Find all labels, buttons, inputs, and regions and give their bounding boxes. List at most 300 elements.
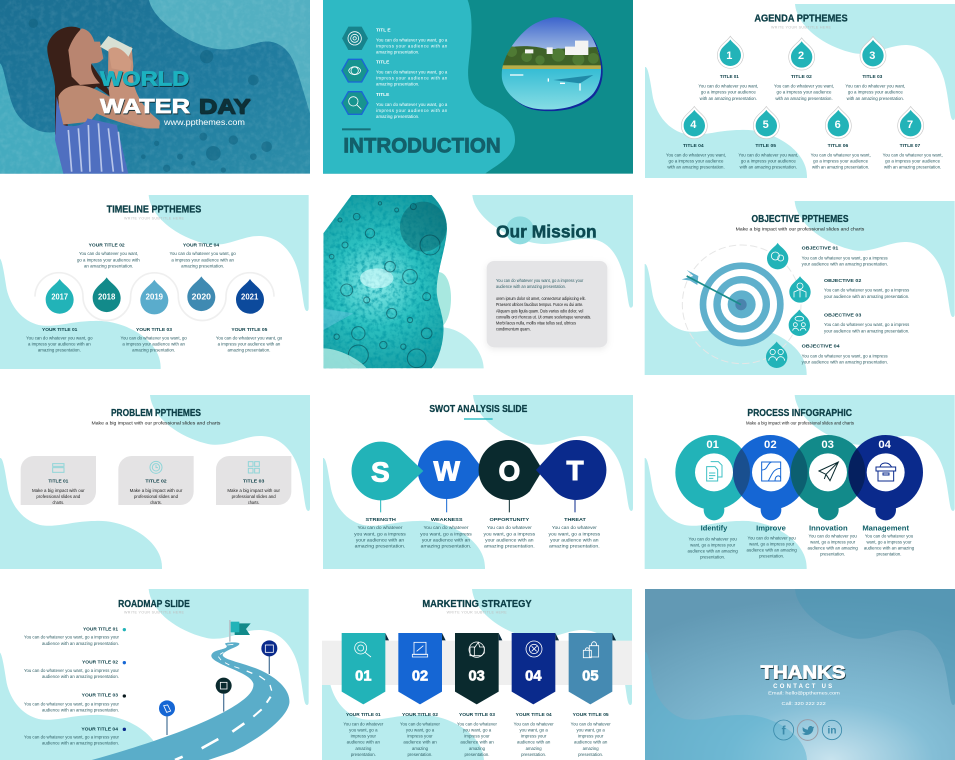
- strategy text 02: impress your: [407, 734, 433, 739]
- agenda item 6: go a impress your audience: [813, 159, 869, 164]
- ribbon 02: [398, 633, 446, 704]
- agenda item 4: TITLE 04: [683, 143, 704, 148]
- process step 02: [733, 435, 808, 520]
- icon: bubbles: [29, 19, 272, 173]
- objective drop 01 with icon: [767, 243, 788, 269]
- swot W shape: W: [433, 456, 460, 487]
- objective text 02: You can do whatever you want, go a impress: [824, 288, 909, 293]
- strategy text 03: impress your: [464, 734, 490, 739]
- panel: SWOT analysis slide: [323, 395, 633, 569]
- road illustration: [92, 642, 289, 760]
- ribbon 02: 02: [412, 668, 428, 684]
- swot S shape: S: [371, 456, 390, 487]
- strategy text 01: amazing: [355, 746, 372, 751]
- problem card 2: professional slides and: [134, 494, 179, 499]
- problem card 1: [21, 456, 96, 505]
- swot text: threat: you want, go a impress: [548, 531, 600, 536]
- text card: audience with an amazing presentation.: [496, 284, 566, 289]
- swot S shape: [352, 442, 423, 500]
- timeline text: your title 04: amazing presentation.: [181, 263, 224, 268]
- agenda item 3: 3: [869, 50, 875, 62]
- text block: title 3: impress your audience with an: [376, 108, 448, 113]
- photo: resort pool: [500, 17, 607, 113]
- problem card 1: TITLE 01: [48, 479, 69, 484]
- agenda item 5: with an amazing presentation.: [740, 165, 797, 170]
- title: World Water Day: WATER: [100, 95, 190, 118]
- timeline drop 2017: 2017: [51, 291, 68, 301]
- roadmap text 01: YOUR TITLE 01: [83, 626, 119, 631]
- swot text: strength: STRENGTH: [365, 517, 396, 522]
- agenda item 1: go a impress your audience: [701, 90, 756, 95]
- text block: title 1: [376, 28, 448, 54]
- strategy text 01: audience with an: [347, 740, 381, 745]
- agenda item 4: go a impress your audience: [668, 159, 724, 164]
- step numbers: [706, 439, 892, 451]
- problem card 1: professional slides and: [36, 494, 81, 499]
- panel: Problem slide: [0, 395, 310, 569]
- objective text 04: [802, 344, 888, 365]
- title: World Water Day: WORLD: [100, 67, 189, 90]
- agenda item 7: TITLE 07: [900, 143, 921, 148]
- heading: Agenda: [754, 14, 848, 29]
- icon: linkedin: [822, 720, 842, 740]
- process text: innovation: want, go a impress your: [810, 539, 856, 544]
- flag: [229, 620, 251, 642]
- heading: SWOT: SWOT ANALYSIS SLIDE: [429, 404, 528, 415]
- swot text: strength: You can do whatever: [357, 525, 403, 530]
- icon: box: [867, 453, 905, 491]
- agenda item 1: You can do whatever you want,: [698, 84, 758, 89]
- icon: facebook: [774, 720, 794, 740]
- agenda item 1: [698, 36, 758, 101]
- objective text 04: your audience with an amazing presentation.: [802, 360, 888, 365]
- agenda item 6: 6: [835, 119, 841, 131]
- timeline wave line: [35, 273, 274, 320]
- swot text: weakness: [420, 517, 472, 548]
- swot W shape: [418, 440, 483, 499]
- heading: Process: Make a big impact with our professional slides and charts: [746, 420, 855, 425]
- timeline text: your title 01: a impress your audience with an: [28, 341, 91, 346]
- strategy text 02: YOUR TITLE 02: [402, 712, 439, 717]
- ribbon 04: [512, 633, 559, 704]
- problem card 2: [118, 456, 194, 505]
- problem card 3: Make a big impact with our: [227, 488, 281, 493]
- process text: improve: audience with an amazing: [746, 547, 797, 552]
- swot text: opportunity: [483, 517, 535, 548]
- objective drop 03 with icon: [789, 310, 810, 336]
- strategy text 01: impress your: [351, 734, 377, 739]
- agenda item 3: You can do whatever you want,: [845, 84, 905, 89]
- objective text 01: You can do whatever you want, go a impress: [802, 255, 888, 260]
- strategy text 03: you want, go a: [463, 728, 492, 733]
- strategy text 05: audience with an: [574, 740, 608, 745]
- timeline drop 2018: 2018: [98, 291, 116, 301]
- problem card 3: professional slides and: [232, 494, 276, 499]
- swot text: weakness: amazing presentation.: [421, 543, 471, 548]
- objective text 03: [824, 312, 909, 333]
- photo: water bubbles: [323, 195, 450, 368]
- timeline text: your title 02: YOUR TITLE 02: [89, 243, 125, 248]
- heading: Problem: Make a big impact with our professional slides and charts: [91, 420, 221, 425]
- strategy text 05: presentation.: [578, 752, 603, 757]
- roadmap text 02: audience with an amazing presentation.: [42, 674, 119, 679]
- timeline drop 2020: 2020: [192, 291, 211, 301]
- agenda item 3: [845, 36, 905, 101]
- text block: title 1: You can do whatever you want, go a: [376, 37, 448, 42]
- agenda item 6: [811, 106, 871, 170]
- timeline text: your title 02: [77, 243, 140, 268]
- timeline text: your title 01: You can do whatever you want, go: [26, 335, 93, 340]
- panel: Marketing strategy slide: [322, 589, 632, 760]
- timeline text: your title 02: an amazing presentation.: [84, 263, 133, 268]
- step numbers: 01: [706, 439, 719, 451]
- heading: Process: PROCESS INFOGRAPHIC: [747, 408, 852, 419]
- heading: Roadmap: ROADMAP SLIDE: [118, 599, 190, 610]
- text block: title 2: TITLE: [376, 60, 390, 66]
- process text: management: [862, 523, 915, 557]
- objective drop 02 with icon: [789, 276, 811, 303]
- process text: management: want, go a impress your: [866, 539, 912, 544]
- roadmap text 03: audience with an amazing presentation.: [42, 707, 119, 712]
- heading: Timeline: [107, 205, 202, 220]
- agenda item 3: with an amazing presentation.: [847, 96, 904, 101]
- heading: Our Mission: [496, 216, 597, 244]
- process text: innovation: presentation.: [820, 552, 845, 557]
- swot text: opportunity: you want, go a impress: [483, 531, 535, 536]
- ribbon 01: 01: [355, 668, 371, 684]
- text block: title 2: You can do whatever you want, go a: [376, 70, 448, 75]
- strategy text 04: amazing: [526, 746, 542, 751]
- step numbers: 02: [764, 439, 777, 451]
- icon: paper plane: [809, 453, 847, 491]
- timeline drop 2018: [93, 277, 121, 312]
- strategy text 02: you want, go a: [406, 728, 435, 733]
- road pin blue: [159, 700, 175, 735]
- panel: World Water Day cover slide: [0, 0, 310, 174]
- text card: You can do whatever you want, go a impress your: [496, 278, 584, 283]
- strategy text 04: audience with an: [517, 740, 551, 745]
- heading: SWOT: [429, 404, 528, 420]
- agenda item 1: 1: [726, 50, 732, 62]
- agenda item 7: go a impress your audience: [885, 159, 941, 164]
- swot text: opportunity: your audience with an: [485, 537, 534, 542]
- objective text 03: your audience with an amazing presentation.: [824, 328, 909, 333]
- heading: Roadmap: [118, 599, 190, 614]
- swot text: threat: [548, 517, 600, 548]
- process step 03: [791, 435, 865, 520]
- process text: innovation: You can do whatever you: [808, 533, 857, 538]
- ribbon 03: 03: [469, 668, 485, 684]
- swot text: strength: [354, 517, 406, 548]
- strategy text 02: [400, 712, 441, 757]
- timeline drop 2021: 2021: [241, 291, 259, 301]
- website label: www.ppthemes.com: [163, 118, 245, 127]
- swot text: strength: your audience with an: [356, 537, 405, 542]
- swot text: threat: THREAT: [564, 517, 586, 522]
- problem card 1: charts.: [52, 500, 64, 505]
- process step 04: [848, 435, 923, 520]
- strategy text 05: impress your: [578, 734, 604, 739]
- process text: identify: want, go a impress your: [690, 542, 736, 547]
- panel: Objective slide: [645, 201, 955, 375]
- agenda item 4: 4: [690, 119, 697, 131]
- problem card 2: Make a big impact with our: [130, 488, 183, 493]
- agenda item 2: TITLE 02: [791, 74, 812, 79]
- timeline text: your title 03: [120, 327, 187, 353]
- heading: Problem: PROBLEM PPTHEMES: [111, 408, 201, 419]
- swot O shape: O: [498, 456, 520, 487]
- process text: improve: [746, 523, 797, 559]
- process text: management: audience with an amazing: [864, 545, 915, 550]
- strategy text 01: You can do whatever: [343, 722, 384, 727]
- heading: Thanks: THANKS: [760, 661, 845, 682]
- panel: Our Mission slide: [323, 195, 633, 368]
- hexagon icon 1: [342, 27, 368, 50]
- process text: innovation: Innovation: [809, 523, 848, 532]
- objective text 01: your audience with an amazing presentation.: [802, 262, 888, 267]
- agenda item 6: TITLE 06: [828, 143, 849, 148]
- strategy text 03: [457, 712, 498, 757]
- strategy text 01: presentation.: [351, 752, 376, 757]
- agenda item 1: TITLE 01: [720, 74, 739, 79]
- roadmap text 01: audience with an amazing presentation.: [42, 641, 119, 646]
- heading: Agenda: AGENDA PPTHEMES: [754, 14, 848, 25]
- strategy text 02: amazing: [412, 746, 429, 751]
- swot text: threat: You can do whatever: [552, 525, 597, 530]
- objective text 04: You can do whatever you want, go a impress: [802, 353, 888, 358]
- strategy text 03: audience with an: [460, 740, 494, 745]
- roadmap text 04: [24, 726, 126, 746]
- timeline drop 2019: [140, 280, 168, 314]
- process text: management: You can do whatever you: [865, 533, 914, 538]
- heading: Our Mission: Our Mission: [496, 222, 597, 242]
- panel: Agenda slide: [645, 4, 955, 178]
- heading: Problem: [91, 408, 221, 425]
- objective text 03: You can do whatever you want, go a impress: [824, 322, 909, 327]
- process text: management: presentation.: [876, 552, 901, 557]
- timeline text: your title 03: You can do whatever you want, go: [120, 335, 187, 340]
- strategy text 03: presentation.: [464, 752, 489, 757]
- target with arrow: [682, 245, 801, 364]
- ribbon 04: 04: [525, 668, 542, 684]
- agenda item 5: go a impress your audience: [741, 159, 796, 164]
- timeline text: your title 04: You can do whatever you want, go: [169, 251, 236, 256]
- strategy text 04: presentation.: [521, 752, 546, 757]
- strategy text 04: YOUR TITLE 04: [516, 712, 552, 717]
- roadmap text 02: [24, 660, 126, 679]
- process step 01: [675, 435, 750, 520]
- objective drop 04 with icon: [766, 342, 787, 368]
- circle overlaps: [733, 449, 865, 496]
- timeline text: your title 02: You can do whatever you want,: [79, 251, 138, 256]
- swot text: opportunity: You can do whatever: [487, 525, 532, 530]
- text block: title 2: impress your audience with an: [376, 76, 448, 81]
- timeline text: your title 02: go a impress your audience with: [77, 257, 140, 262]
- objective text 01: OBJECTIVE 01: [802, 246, 839, 251]
- swot text: opportunity: OPPORTUNITY: [489, 517, 529, 522]
- contact details: [768, 684, 840, 707]
- agenda item 1: with an amazing presentation.: [700, 96, 757, 101]
- strategy text 02: presentation.: [407, 752, 432, 757]
- problem card 2: TITLE 02: [145, 479, 167, 484]
- strategy text 02: audience with an: [403, 740, 437, 745]
- objective text 02: [824, 278, 909, 299]
- agenda item 4: [666, 106, 726, 170]
- agenda item 2: with an amazing presentation.: [775, 96, 833, 101]
- icon: map: [752, 453, 790, 491]
- agenda item 2: You can do whatever you want,: [774, 84, 834, 89]
- panel: Timeline slide: [0, 195, 309, 369]
- roadmap text 02: YOUR TITLE 02: [82, 660, 119, 665]
- objective text 01: [802, 246, 888, 267]
- heading: Objective: [736, 214, 865, 231]
- heading: Timeline: WRITE YOUR SUBTITLE HERE: [124, 216, 185, 220]
- heading: Process: [746, 408, 855, 425]
- text card: [487, 261, 607, 347]
- swot text: threat: your audience with an: [550, 537, 599, 542]
- swot text: threat: amazing presentation.: [549, 543, 600, 548]
- process text: identify: You can do whatever you: [688, 536, 737, 541]
- roadmap text 01: You can do whatever you want, go a impress your: [24, 635, 120, 640]
- text block: title 1: impress your audience with an: [376, 43, 448, 48]
- problem card 1: Make a big impact with our: [32, 488, 85, 493]
- heading: Roadmap: WRITE YOUR SUBTITLE HERE: [124, 610, 185, 614]
- timeline text: your title 01: YOUR TITLE 01: [42, 327, 78, 332]
- agenda item 4: with an amazing presentation.: [667, 165, 725, 170]
- icon: linkedin: in: [828, 726, 836, 737]
- text block: title 3: You can do whatever you want, go a: [376, 102, 448, 107]
- agenda item 7: 7: [907, 119, 913, 131]
- heading: Marketing strategy: [422, 599, 532, 614]
- panel: Roadmap slide: [0, 589, 309, 760]
- agenda item 5: [738, 106, 798, 170]
- roadmap text 04: audience with an amazing presentation.: [42, 741, 119, 746]
- timeline text: your title 03: YOUR TITLE 03: [136, 327, 173, 332]
- swot text: strength: amazing presentation.: [355, 543, 405, 548]
- swot text: weakness: WEAKNESS: [431, 517, 462, 522]
- text card: Aliquam quis ligula quam. Duis varius odio dolor, vel: [496, 308, 583, 313]
- swot O shape: [479, 440, 543, 500]
- swot text: weakness: your audience with an: [422, 537, 471, 542]
- heading: Objective: Make a big impact with our professional slides and charts: [736, 226, 865, 231]
- roadmap text 04: You can do whatever you want, go a impress your: [24, 734, 120, 739]
- swot text: weakness: You can do whatever: [423, 525, 469, 530]
- objective text 02: your audience with an amazing presentation.: [824, 294, 909, 299]
- timeline text: your title 01: amazing presentation.: [38, 348, 81, 353]
- strategy text 04: You can do whatever: [514, 722, 554, 727]
- roadmap text 03: You can do whatever you want, go a impress your: [24, 701, 120, 706]
- roadmap text 03: [24, 693, 126, 712]
- process text: improve: You can do whatever you: [747, 535, 796, 540]
- ribbon 01: [342, 633, 389, 704]
- stem lines: [381, 497, 575, 512]
- strategy text 02: You can do whatever: [400, 722, 441, 727]
- text block: title 1: TITL E: [376, 28, 391, 34]
- text card: condimentum quam.: [496, 327, 531, 332]
- strategy text 05: You can do whatever: [571, 722, 611, 727]
- step numbers: 04: [878, 439, 892, 451]
- hexagon icon 3: [342, 92, 368, 114]
- strategy text 04: [514, 712, 554, 757]
- strategy text 03: YOUR TITLE 03: [459, 712, 496, 717]
- text card: orem ipsum dolor sit amet, consectetur adipiscing elit.: [496, 296, 586, 301]
- timeline text: your title 04: [169, 243, 236, 268]
- heading: Timeline: TIMELINE PPTHEMES: [107, 205, 202, 216]
- strategy text 01: YOUR TITLE 01: [346, 712, 381, 717]
- strategy text 04: you want, go a: [519, 728, 548, 733]
- text block: title 3: TITLE: [376, 92, 390, 98]
- process text: identify: audience with an amazing: [687, 548, 738, 553]
- contact details: Email: hello@ppthemes.com: [768, 690, 840, 696]
- text block: title 2: amazing presentation.: [376, 82, 419, 87]
- heading: Agenda: WRITE YOUR SUBTITLE HERE: [771, 25, 832, 29]
- agenda item 3: go a impress your audience: [848, 90, 903, 95]
- contact details: CONTACT US: [773, 684, 832, 690]
- text block: title 3: [376, 92, 448, 119]
- swot text: strength: you want, go a impress: [354, 531, 406, 536]
- text card: Morbi lacus nulla, mollis vitae tellus sed, ultrices: [496, 320, 576, 325]
- step numbers: 03: [821, 439, 834, 451]
- panel: Introduction slide: [323, 0, 633, 174]
- process text: improve: Improve: [756, 523, 786, 532]
- roadmap text 03: YOUR TITLE 03: [82, 693, 119, 698]
- agenda item 2: [774, 38, 834, 101]
- agenda item 7: [883, 106, 943, 170]
- strategy text 04: impress your: [521, 734, 547, 739]
- swot text: weakness: you want, go a impress: [420, 531, 472, 536]
- timeline text: your title 05: You can do whatever you want, go: [216, 335, 283, 340]
- process text: identify: Identify: [701, 523, 728, 532]
- process text: improve: want, go a impress your: [749, 541, 795, 546]
- timeline text: your title 01: [26, 327, 93, 353]
- heading: Marketing strategy: WRITE YOUR SUBTITLE HERE: [447, 610, 507, 614]
- process text: identify: [687, 523, 738, 559]
- process text: identify: presentation.: [700, 554, 725, 559]
- problem card 2: charts.: [150, 500, 162, 505]
- roadmap text 04: YOUR TITLE 04: [81, 726, 119, 731]
- problem card 3: [216, 456, 291, 505]
- agenda item 5: You can do whatever you want,: [738, 153, 798, 158]
- timeline drop 2021: [236, 279, 264, 314]
- agenda item 3: TITLE 03: [862, 74, 883, 79]
- timeline text: your title 05: amazing presentation.: [227, 348, 270, 353]
- text block: title 2: [376, 60, 448, 87]
- process text: innovation: audience with an amazing: [807, 545, 858, 550]
- road pin dark: [216, 678, 232, 712]
- text card: convallis orci rhoncus ut. Ut ornare scelerisque venenatis.: [496, 314, 591, 319]
- strategy text 03: You can do whatever: [457, 722, 498, 727]
- agenda item 5: TITLE 05: [755, 143, 777, 148]
- roadmap text 01: [24, 626, 126, 646]
- ribbon 05: [569, 633, 616, 704]
- timeline text: your title 05: a impress your audience with an: [218, 341, 281, 346]
- problem card 3: TITLE 03: [243, 479, 265, 484]
- strategy text 05: you want, go a: [576, 728, 605, 733]
- hexagon icon 2: [342, 59, 368, 82]
- objective text 03: OBJECTIVE 03: [824, 312, 862, 317]
- roadmap text 02: You can do whatever you want, go a impress your: [24, 668, 120, 673]
- timeline text: your title 03: a impress your audience with an: [122, 341, 186, 346]
- strategy text 03: amazing: [469, 746, 486, 751]
- strategy text 01: you want, go a: [349, 728, 378, 733]
- timeline text: your title 03: amazing presentation.: [132, 348, 175, 353]
- title: World Water Day: [100, 67, 251, 118]
- timeline drop 2020: [187, 276, 215, 311]
- text card: Praesent ultrices faucibus tempus. Fusce eu dui ante.: [496, 302, 583, 307]
- agenda item 2: 2: [798, 50, 804, 62]
- process text: management: Management: [862, 523, 909, 532]
- strategy text 01: [343, 712, 384, 757]
